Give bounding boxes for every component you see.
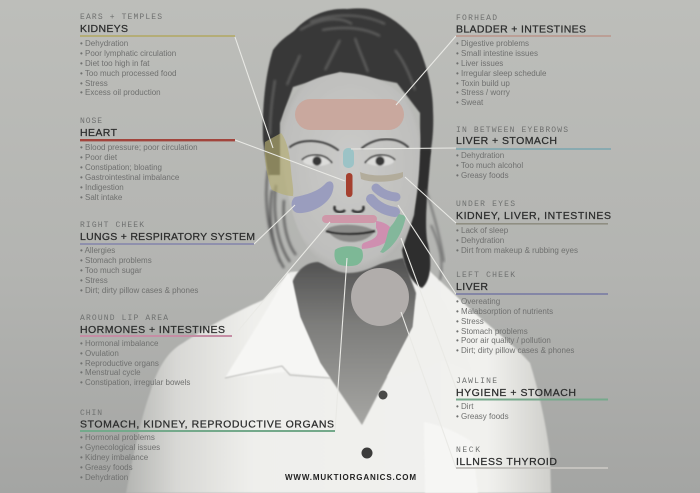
list: • Poor diet [80, 153, 118, 162]
hair highlights [270, 16, 415, 135]
sublabel: RIGHT CHEEK [80, 221, 144, 230]
list: • Too much alcohol [456, 161, 523, 170]
sublabel: UNDER EYES [456, 200, 515, 209]
list: • Dirt from makeup & rubbing eyes [456, 246, 578, 255]
list [456, 151, 523, 180]
list: • Blood pressure; poor circulation [80, 143, 198, 152]
list: • Dehydration [456, 151, 504, 160]
sublabel: LEFT CHEEK [456, 271, 515, 280]
panel: in between eyebrows [456, 126, 611, 180]
list: • Stomach problems [80, 256, 152, 265]
connector lines [232, 36, 460, 468]
rule [456, 293, 608, 295]
button upper [378, 390, 388, 400]
panel: jawline [456, 377, 608, 421]
website url: WWW.MUKTIORGANICS.COM [285, 473, 416, 482]
shirt [126, 262, 551, 493]
sublabel: FORHEAD [456, 14, 497, 23]
rule [80, 243, 254, 245]
zone: ears and temples [265, 133, 293, 196]
rule [80, 35, 235, 37]
list: • Dehydration [80, 473, 128, 482]
list: • Dehydration [456, 236, 504, 245]
zone: left cheek upper [376, 188, 396, 197]
face [281, 73, 420, 273]
sublabel: IN BETWEEN EYEBROWS [456, 126, 568, 135]
list: • Salt intake [80, 193, 123, 202]
list: • Liver issues [456, 59, 503, 68]
list [80, 433, 160, 482]
zone: forehead [295, 99, 404, 130]
list: • Overeating [456, 297, 500, 306]
hair mass [263, 8, 433, 175]
line: liver stomach [351, 148, 456, 149]
panel: right cheek [80, 221, 255, 295]
heading: LIVER [456, 281, 488, 293]
sublabel: EARS + TEMPLES [80, 13, 162, 22]
list: • Poor air quality / pollution [456, 336, 551, 345]
sublabel: AROUND LIP AREA [80, 314, 168, 323]
zone: under eyes [360, 172, 403, 182]
collar shadow [225, 366, 330, 378]
panel: under eyes [456, 200, 611, 255]
heading: BLADDER + INTESTINES [456, 24, 586, 36]
list [456, 226, 578, 255]
list: • Hormonal imbalance [80, 339, 159, 348]
panel: left cheek [456, 271, 608, 355]
neck and chest [292, 258, 416, 425]
list [456, 297, 574, 355]
zone: left cheek lower [371, 199, 395, 212]
heading: LIVER + STOMACH [456, 135, 557, 147]
list: • Digestive problems [456, 39, 529, 48]
pocket [424, 422, 478, 493]
list: • Sweat [456, 98, 484, 107]
list: • Poor lymphatic circulation [80, 49, 176, 58]
list [80, 143, 198, 202]
list: • Constipation; bloating [80, 163, 162, 172]
list: • Reproductive organs [80, 359, 159, 368]
collar right [387, 285, 472, 377]
line: lungs [254, 205, 295, 244]
rule [456, 467, 608, 469]
list: • Lack of sleep [456, 226, 509, 235]
zone: chin [334, 246, 363, 266]
list [80, 246, 198, 295]
line: heart [235, 140, 345, 181]
heading: KIDNEY, LIVER, INTESTINES [456, 210, 611, 222]
list: • Excess oil production [80, 88, 161, 97]
list: • Dehydration [80, 39, 128, 48]
line: neck [401, 312, 456, 468]
list: • Gastrointestinal imbalance [80, 173, 180, 182]
list: • Greasy foods [80, 463, 133, 472]
list: • Dirt [456, 402, 474, 411]
sublabel: CHIN [80, 409, 102, 418]
heading: KIDNEYS [80, 23, 128, 35]
left wisps of hair [266, 170, 296, 268]
list: • Allergies [80, 246, 115, 255]
lips [326, 225, 375, 242]
list: • Indigestion [80, 183, 124, 192]
list: • Stress [456, 317, 484, 326]
list: • Greasy foods [456, 171, 509, 180]
panel: neck [456, 446, 608, 469]
rule [80, 335, 232, 337]
rule [80, 139, 235, 141]
collar left [225, 272, 330, 378]
panel: ears and temples [80, 13, 235, 97]
list: • Diet too high in fat [80, 59, 150, 68]
line: left cheek [398, 205, 456, 294]
panel: nose [80, 117, 235, 202]
list [456, 402, 509, 421]
panel: chin [80, 409, 335, 482]
rule [456, 223, 608, 225]
right wisps of hair [426, 190, 444, 280]
list: • Too much processed food [80, 69, 176, 78]
list: • Constipation, irregular bowels [80, 378, 190, 387]
heading: LUNGS + RESPIRATORY SYSTEM [80, 231, 255, 243]
rule [456, 148, 611, 150]
list: • Stress / worry [456, 88, 510, 97]
zone: nose [346, 173, 352, 197]
line: jawline [401, 238, 460, 399]
list [456, 39, 547, 107]
sublabel: NECK [456, 446, 480, 455]
list: • Malabsorption of nutrients [456, 307, 553, 316]
list: • Kidney imbalance [80, 453, 149, 462]
line: bladder [396, 36, 456, 105]
portrait photo [126, 8, 551, 493]
list: • Hormonal problems [80, 433, 155, 442]
eyes [302, 155, 395, 166]
sublabel: JAWLINE [456, 377, 497, 386]
list [80, 339, 190, 387]
zone: lip area top [322, 215, 377, 223]
face zone overlays [265, 99, 409, 326]
list: • Menstrual cycle [80, 368, 141, 377]
list: • Toxin build up [456, 79, 510, 88]
right hair clump [402, 150, 431, 288]
heading: HEART [80, 127, 118, 139]
list: • Dirt; dirty pillow cases & phones [80, 286, 198, 295]
list: • Too much sugar [80, 266, 142, 275]
rule [456, 35, 611, 37]
zone: lip area right [362, 221, 393, 249]
list: • Stress [80, 276, 108, 285]
line: chin [335, 258, 347, 431]
zone: neck [351, 268, 409, 326]
list: • Small intestine issues [456, 49, 538, 58]
panel: around lip area [80, 314, 232, 387]
list: • Greasy foods [456, 412, 509, 421]
button lower [362, 448, 372, 458]
list: • Irregular sleep schedule [456, 69, 547, 78]
rule [80, 430, 335, 432]
panel: forehead [456, 14, 611, 107]
zone: right cheek [292, 181, 334, 213]
list: • Dirt; dirty pillow cases & phones [456, 346, 574, 355]
heading: HORMONES + INTESTINES [80, 324, 225, 336]
list [80, 39, 176, 97]
heading: STOMACH, KIDNEY, REPRODUCTIVE ORGANS [80, 418, 334, 430]
line: kidneys [235, 37, 273, 148]
list: • Ovulation [80, 349, 119, 358]
zone: between eyebrows [343, 148, 354, 168]
heading: ILLNESS THYROID [456, 456, 557, 468]
list: • Stomach problems [456, 327, 528, 336]
line: hormones [232, 222, 330, 338]
list: • Stress [80, 79, 108, 88]
eyebrows [290, 139, 408, 150]
heading: HYGIENE + STOMACH [456, 387, 576, 399]
line: under eyes [405, 177, 456, 223]
list: • Gynecological issues [80, 443, 160, 452]
zone: jawline [380, 214, 406, 253]
nose [334, 206, 364, 212]
sublabel: NOSE [80, 117, 102, 126]
rule [456, 398, 608, 400]
